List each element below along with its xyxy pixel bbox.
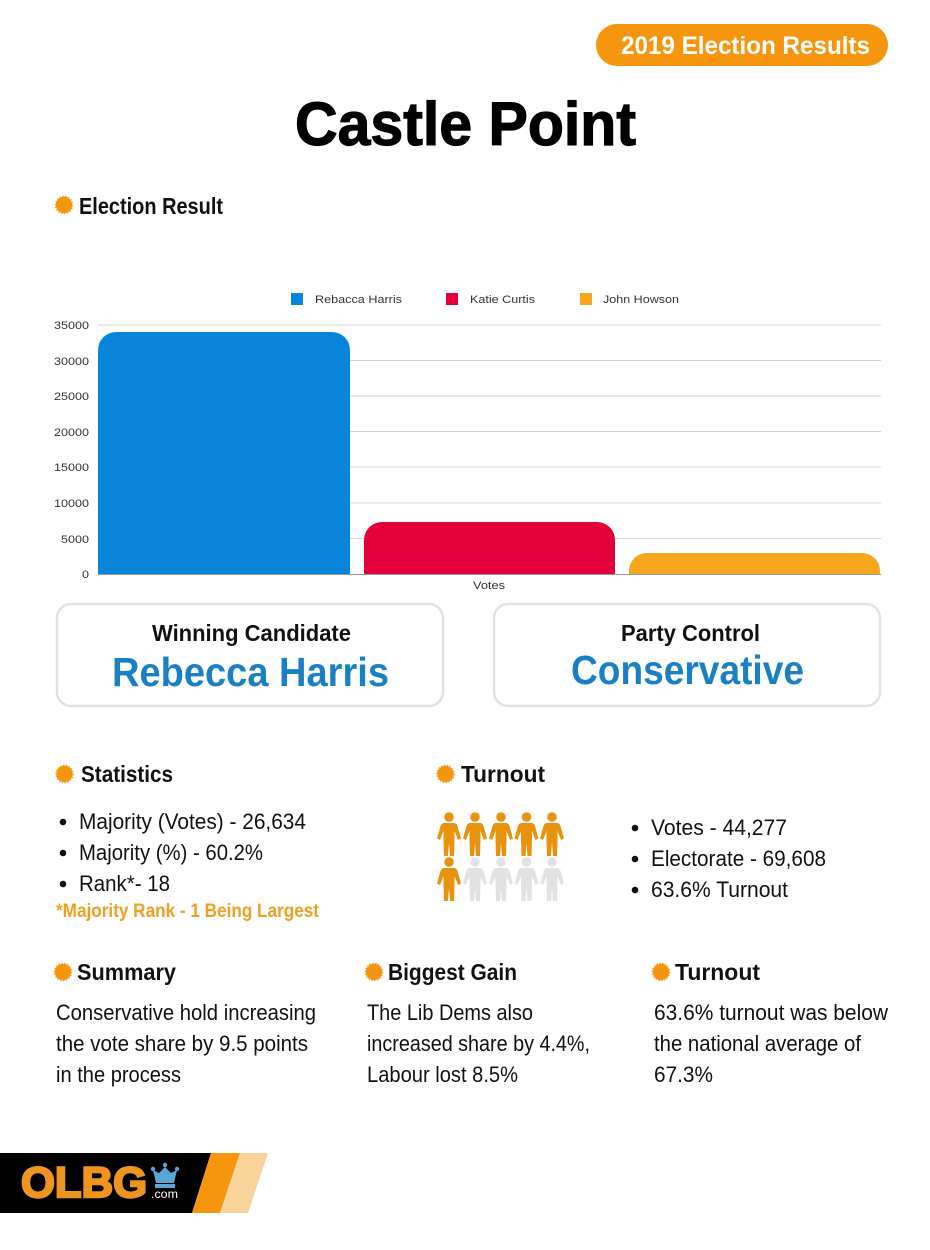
logo: OLBG.com xyxy=(0,1153,268,1213)
y axis labels: 0 xyxy=(82,569,89,581)
chart legend xyxy=(291,293,679,306)
badge: 2019 Election Results: 2019 Election Results xyxy=(621,32,870,60)
text: summary: Conservative hold increasing xyxy=(56,1000,316,1025)
y axis labels: 15000 xyxy=(54,462,89,474)
text: turnout comparison: 63.6% turnout was below xyxy=(654,1000,888,1025)
bar: Rebecca Harris xyxy=(98,332,350,574)
icon: turnout pictogram, 6 of 10 people xyxy=(437,812,564,901)
text: biggest gain: Labour lost 8.5% xyxy=(367,1062,518,1087)
y axis labels: 10000 xyxy=(54,498,89,510)
heading: Statistics: Statistics xyxy=(81,761,173,787)
statistics list: Rank*- 18 xyxy=(79,871,170,896)
statistics list xyxy=(60,809,306,896)
icon: crown xyxy=(151,1163,179,1188)
text: turnout comparison: 67.3% xyxy=(654,1062,713,1087)
heading: Turnout comparison: Turnout xyxy=(675,959,760,985)
panel: winning candidate xyxy=(57,604,443,706)
panel: party control xyxy=(494,604,880,706)
statistics list: Majority (%) - 60.2% xyxy=(79,840,263,865)
y axis labels: 20000 xyxy=(54,427,89,439)
statistics list: Majority (Votes) - 26,634 xyxy=(79,809,306,834)
y axis labels: 30000 xyxy=(54,356,89,368)
panel: party control: Party Control xyxy=(621,620,760,646)
turnout list: Votes - 44,277 xyxy=(651,815,787,840)
text: summary: the vote share by 9.5 points xyxy=(56,1031,308,1056)
panel: party control: Conservative xyxy=(571,647,804,693)
y axis labels: 35000 xyxy=(54,320,89,332)
bar: Katie Curtis xyxy=(364,522,615,574)
heading: Election Result: Election Result xyxy=(79,193,223,219)
y axis labels: 25000 xyxy=(54,391,89,403)
chart legend: John Howson xyxy=(603,294,679,306)
bar chart: votes by candidate xyxy=(54,293,881,592)
badge: 2019 Election Results xyxy=(596,24,888,66)
text: biggest gain: The Lib Dems also xyxy=(367,1000,533,1025)
logo: OLBG.com: OLBG xyxy=(21,1159,147,1207)
heading: Biggest Gain: Biggest Gain xyxy=(388,959,517,985)
logo: OLBG.com: .com xyxy=(151,1187,178,1201)
text: biggest gain: increased share by 4.4%, xyxy=(367,1031,590,1056)
text: biggest gain xyxy=(367,1000,590,1087)
turnout list: Electorate - 69,608 xyxy=(651,846,826,871)
panel: winning candidate: Winning Candidate xyxy=(152,620,351,646)
footnote: majority rank: *Majority Rank - 1 Being Largest xyxy=(56,901,320,922)
text: turnout comparison xyxy=(654,1000,888,1087)
y axis labels: 5000 xyxy=(61,534,89,546)
chart legend: Rebacca Harris xyxy=(315,294,403,306)
heading: Summary: Summary xyxy=(77,959,176,985)
heading: Turnout: Turnout xyxy=(461,761,545,787)
panel: winning candidate: Rebecca Harris xyxy=(112,649,389,695)
turnout list: 63.6% Turnout xyxy=(651,877,788,902)
title: Castle Point xyxy=(295,90,636,158)
chart legend: Katie Curtis xyxy=(470,294,536,306)
text: summary: in the process xyxy=(56,1062,181,1087)
bar: John Howson xyxy=(629,553,880,574)
text: turnout comparison: the national average of xyxy=(654,1031,862,1056)
y axis labels xyxy=(54,320,89,581)
text: summary xyxy=(56,1000,316,1087)
turnout list xyxy=(632,815,826,902)
x axis label: Votes xyxy=(473,580,506,592)
